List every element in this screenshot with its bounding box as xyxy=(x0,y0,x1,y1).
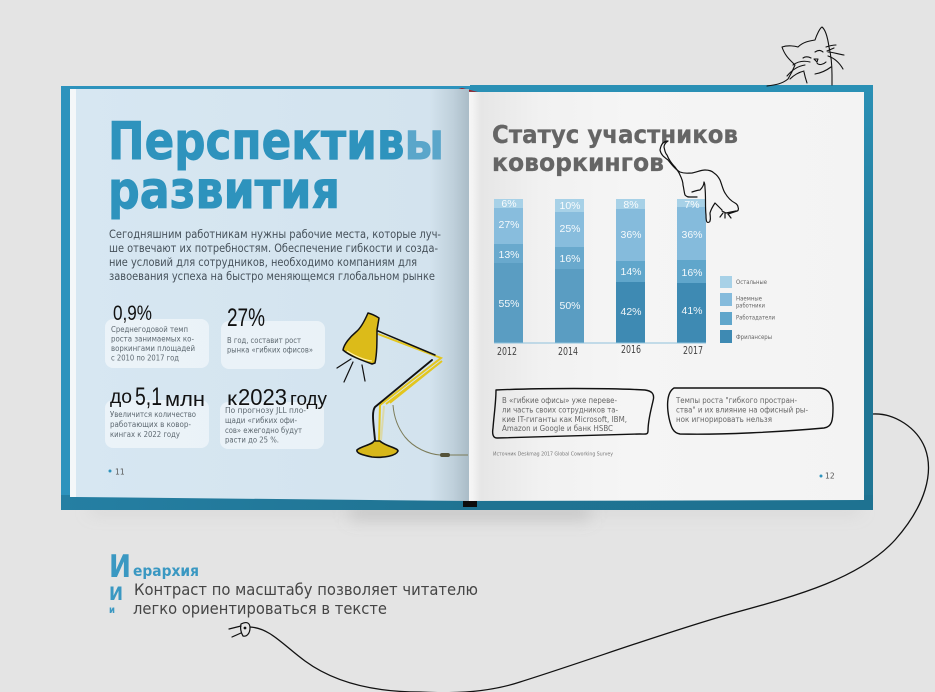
heading: Иерархия xyxy=(109,549,199,616)
text block: hierarchy caption xyxy=(109,549,478,618)
cable with plug xyxy=(229,414,928,692)
stat card: 0,9%: 0,9% xyxy=(113,302,152,325)
title: left page heading: Перспективы xyxy=(108,112,444,172)
bar: 2012: 13% xyxy=(498,249,520,261)
book shadow xyxy=(90,505,860,520)
stat card: к 2023 году: По прогнозу JLL пло- xyxy=(225,406,306,415)
stat card: 0,9%: роста занимаемых ко- xyxy=(111,334,194,344)
stat card: до 5,1 млн xyxy=(105,383,209,448)
stat card: до 5,1 млн: до xyxy=(110,387,132,408)
icon: cat climbing down chart xyxy=(660,141,738,222)
legend: Фрилансеры xyxy=(736,334,772,341)
callout: flexible offices: Amazon и Google и банк HSBC xyxy=(502,424,613,433)
legend: работники xyxy=(736,302,765,310)
stat card: 0,9%: Среднегодовой темп xyxy=(111,325,188,334)
callout: growth rates xyxy=(668,388,833,434)
legend xyxy=(720,276,775,343)
text block: intro paragraph: завоевания успеха на быстро меняющемся глобальном рынке xyxy=(109,269,435,283)
stat card: 0,9% xyxy=(105,302,209,368)
panel: right page xyxy=(469,92,864,501)
callout: flexible offices: ли часть своих сотрудников та- xyxy=(502,406,618,414)
icon: desk lamp xyxy=(337,313,468,457)
description: Контраст по масштабу позволяет читателю xyxy=(134,581,478,599)
stat card: к 2023 году: к xyxy=(227,389,238,410)
panel: left page xyxy=(70,89,469,501)
callout: growth rates: ства" и их влияние на офисный ры- xyxy=(676,406,808,414)
bar: 2017: 7% xyxy=(684,199,700,211)
bar: 2016: 8% xyxy=(623,199,639,211)
bar: 2016 xyxy=(616,199,645,356)
callout: flexible offices: В «гибкие офисы» уже переве- xyxy=(502,396,617,405)
stat card: к 2023 году: году xyxy=(290,389,327,409)
bar: 2014: 16% xyxy=(559,253,581,265)
legend: Наемные xyxy=(736,296,762,302)
source note: Источник Deskmag 2017 Global Coworking Survey xyxy=(493,452,613,458)
text block: intro paragraph: ше отвечают их потребностям. Обеспечение гибкости и созда- xyxy=(109,241,438,255)
stat card: до 5,1 млн: 5,1 xyxy=(135,383,162,411)
bar: 2012: 6% xyxy=(501,198,517,210)
page number 11 xyxy=(108,468,125,476)
stat card: к 2023 году xyxy=(220,384,327,449)
bar: 2017: 36% xyxy=(681,229,703,241)
heading: Иерархия: и xyxy=(109,605,115,616)
bar: 2014: 50% xyxy=(559,300,581,312)
bar: 2016: 36% xyxy=(620,229,642,241)
stat card: до 5,1 млн: кингах к 2022 году xyxy=(110,430,180,439)
page number 12 xyxy=(820,472,835,480)
legend: Остальные xyxy=(736,279,767,286)
bar: 2017: 41% xyxy=(681,305,703,317)
stat card: к 2023 году: расти до 25 %. xyxy=(225,436,279,444)
bar: 2012 xyxy=(494,198,523,358)
bar: 2016: 42% xyxy=(620,306,642,318)
stat card: 27%: 27% xyxy=(227,304,265,332)
stat card: 0,9%: с 2010 по 2017 год xyxy=(111,354,179,362)
bar: 2014 xyxy=(555,199,584,358)
stat card: 27%: В год, составит рост xyxy=(227,336,301,345)
heading: Иерархия: И xyxy=(109,583,123,605)
bookmark ribbon xyxy=(452,88,478,92)
bar: 2014: 10% xyxy=(559,200,581,212)
bar: 2014: 25% xyxy=(559,223,581,235)
stat card: до 5,1 млн: млн xyxy=(165,389,205,411)
description xyxy=(133,581,478,618)
stat card: до 5,1 млн: Увеличится количество xyxy=(110,410,196,419)
title: right page heading xyxy=(492,120,738,177)
page number 11: 11 xyxy=(115,468,125,476)
title: left page heading xyxy=(108,112,444,221)
stat card: 0,9%: воркингами площадей xyxy=(111,344,195,353)
bar: 2014: 2014 xyxy=(558,346,578,358)
text block: intro paragraph xyxy=(109,227,441,283)
text block: intro paragraph: ние условий для сотрудников, необходимо компаниям для xyxy=(109,255,417,269)
bar: 2017: 16% xyxy=(681,267,703,279)
bar: 2012: 55% xyxy=(498,298,520,310)
callout: growth rates: Темпы роста "гибкого простран- xyxy=(675,396,797,405)
stat card: до 5,1 млн: работающих в ковор- xyxy=(110,420,191,429)
callout: flexible offices: кие IT-гиганты как Microsoft, IBM, xyxy=(502,415,627,424)
title: right page heading: Статус участников xyxy=(492,120,738,149)
bar: 2016: 14% xyxy=(620,266,642,278)
stat card: к 2023 году: щади «гибких офи- xyxy=(225,416,297,425)
stat card: к 2023 году: сов» ежегодно будут xyxy=(225,426,302,435)
callout: flexible offices xyxy=(493,388,654,438)
legend: Работадатели xyxy=(736,314,775,322)
book cover xyxy=(61,85,873,510)
bar: 2016: 2016 xyxy=(621,344,641,356)
title: right page heading: коворкингов xyxy=(492,148,664,177)
bar: 2017 xyxy=(677,199,706,357)
callout: growth rates: нок игнорировать нельзя xyxy=(676,415,772,424)
stat card: 27%: рынка «гибких офисов» xyxy=(227,346,313,354)
stat card: 27% xyxy=(221,304,325,369)
bar: 2012: 2012 xyxy=(497,346,517,358)
page number 12: 12 xyxy=(825,472,835,480)
heading: Иерархия: И xyxy=(109,549,131,585)
title: left page heading: развития xyxy=(108,161,340,221)
bar: 2012: 27% xyxy=(498,219,520,231)
icon: plug xyxy=(229,623,250,637)
description: легко ориентироваться в тексте xyxy=(133,600,387,618)
text block: intro paragraph: Сегодняшним работникам нужны рабочие места, которые луч- xyxy=(109,227,441,241)
stat card: к 2023 году: 2023 xyxy=(238,384,287,410)
bar: 2017: 2017 xyxy=(683,345,703,357)
stacked bar chart xyxy=(494,198,706,358)
icon: cat peeking above book xyxy=(767,27,844,86)
heading: Иерархия: ерархия xyxy=(133,562,199,580)
